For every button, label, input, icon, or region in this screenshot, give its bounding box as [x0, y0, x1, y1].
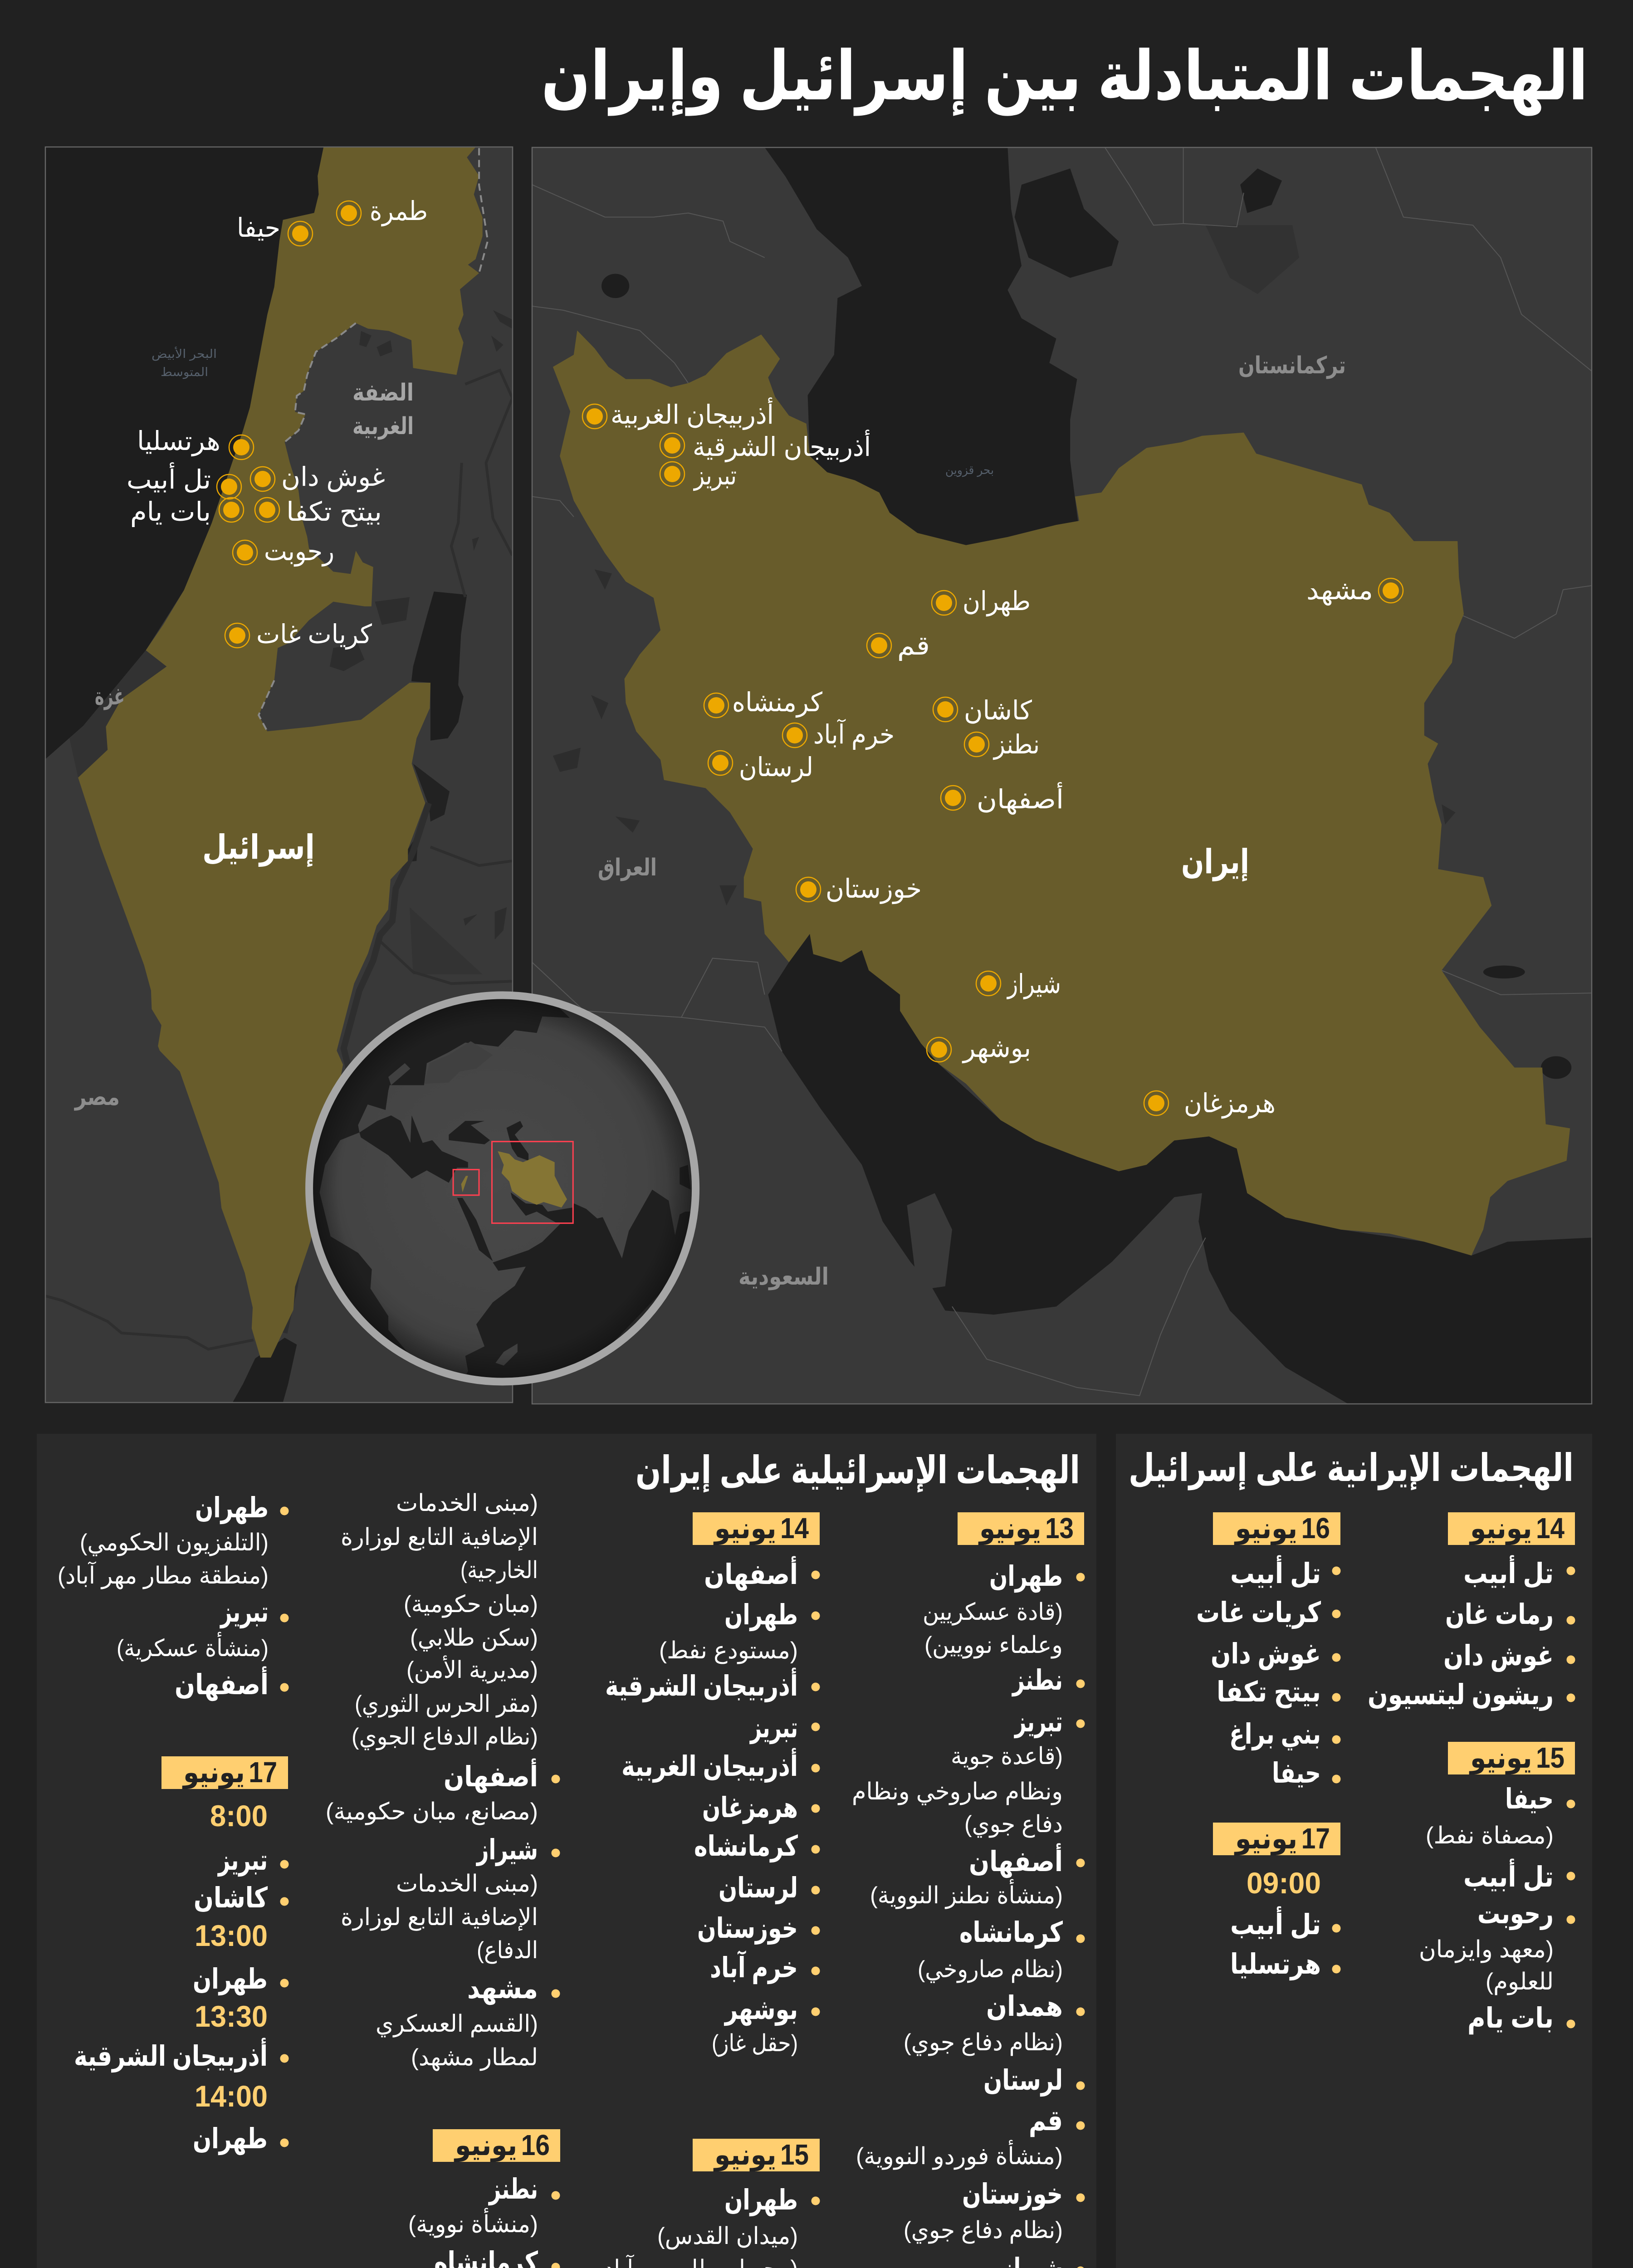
column: June 13: أصفهان	[969, 1843, 1063, 1878]
region label: Saudi Arabia: السعودية	[738, 1264, 829, 1290]
region label: West Bank	[352, 380, 414, 440]
column: June 15 continued and June 16: نطنز	[488, 2174, 538, 2205]
column: June 14 and 15: بات يام	[1467, 2003, 1554, 2035]
city labels: Iran: شيراز	[1007, 969, 1061, 1000]
column: June 13: (قادة عسكريين	[923, 1599, 1063, 1626]
city labels: Iran: تبريز	[693, 461, 737, 491]
column: June 13: طهران	[989, 1561, 1063, 1593]
globe locator	[306, 989, 702, 1388]
city labels: Iran: أصفهان	[977, 782, 1064, 815]
column: June 14 and 15: للعلوم)	[1486, 1969, 1554, 1995]
Iran territory	[553, 331, 1570, 1256]
column: June 14 and 15: خوزستان	[697, 1913, 798, 1945]
column: June 15 continued and June 16: (نظام الدفاع الجوي)	[352, 1724, 538, 1750]
city labels: Iran: هرمزغان	[1184, 1089, 1276, 1119]
globe oceans	[306, 989, 702, 1388]
column: June 16 and 17: كريات غات	[1196, 1597, 1321, 1629]
Scandinavia and Madagascar	[388, 1041, 518, 1366]
column: June 16 continued and June 17: أصفهان	[175, 1666, 269, 1701]
land borders	[45, 1296, 254, 1349]
column: June 15 continued and June 16: (مبان حكومية)	[404, 1591, 538, 1618]
Dead Sea	[411, 591, 467, 741]
column: June 15 continued and June 16: مشهد	[467, 1973, 538, 2005]
city labels: Iran: أذربيجان الشرقية	[693, 430, 871, 463]
column: June 16 and 17: غوش دان	[1211, 1638, 1321, 1670]
date: June 16: 16 يونيو	[454, 2129, 550, 2162]
column: June 16 continued and June 17: كاشان	[194, 1882, 268, 1914]
time 14:00: 14:00	[195, 2079, 268, 2113]
city labels: Iran: لرستان	[739, 753, 813, 783]
time 13:30: 13:30	[195, 1999, 268, 2033]
column: June 15 continued and June 16: شيراز	[476, 1834, 538, 1866]
country label: Israel: إسرائيل	[202, 828, 315, 867]
column: June 13: تبريز	[1014, 1706, 1063, 1738]
column: June 14 and 15	[590, 1512, 820, 2268]
city labels: Israel: كريات غات	[256, 620, 372, 650]
column: June 15 continued and June 16: (مقر الحرس الثوري)	[355, 1691, 538, 1718]
column: June 16 continued and June 17: تبريز	[217, 1845, 268, 1877]
column: June 16 continued and June 17: تبريز	[220, 1597, 269, 1628]
land shading: West Bank and Jordan	[330, 310, 512, 939]
country label: Iran: إيران	[1181, 843, 1249, 881]
column: June 13	[852, 1512, 1085, 2268]
column: June 14 and 15	[1368, 1512, 1575, 2035]
region label: Mediterranean: البحر الأبيض	[152, 346, 217, 361]
heading: Israeli attacks on Iran: الهجمات الإسرائيلية على إيران	[636, 1449, 1080, 1493]
city labels: Iran: كاشان	[964, 696, 1032, 725]
panel: Iranian attacks on Israel	[1116, 1434, 1592, 2268]
column: June 13: نطنز	[1012, 1665, 1063, 1696]
column: June 15 continued and June 16: لمطار مشهد)	[411, 2044, 538, 2071]
date: June 17: 17 يونيو	[1234, 1822, 1330, 1856]
Iran map labels	[582, 352, 1403, 1290]
column: June 14 and 15: (مستودع نفط)	[659, 1637, 798, 1664]
column: June 16 continued and June 17: (منشأة عسكرية)	[117, 1632, 269, 1662]
globe ring	[309, 995, 696, 1382]
date: June 14: 14 يونيو	[1469, 1512, 1565, 1545]
column: June 16 and 17: بني براغ	[1229, 1719, 1321, 1750]
panel: Iran map	[532, 147, 1592, 1408]
region label: Iraq: العراق	[598, 855, 657, 881]
column: June 16 continued and June 17: أذربيجان الشرقية	[74, 2038, 268, 2072]
country borders	[1105, 147, 1183, 225]
time 09:00: 09:00	[1247, 1866, 1321, 1900]
region label: Mediterranean	[152, 346, 217, 379]
land shading: Iraq and surroundings	[553, 569, 1456, 905]
column: June 14 and 15: تل أبيب	[1463, 1858, 1554, 1893]
markers: Israel cities	[217, 201, 361, 648]
region label: Gaza: غزة	[95, 684, 125, 710]
column: June 14 and 15: رحوبت	[1477, 1898, 1554, 1930]
column: June 14 and 15: كرمانشاه	[694, 1831, 798, 1862]
city labels: Iran: طهران	[963, 587, 1031, 617]
date: June 14: 14 يونيو	[713, 1512, 809, 1545]
column: June 14 and 15: أصفهان	[704, 1556, 798, 1591]
column: June 16 and 17	[1196, 1512, 1341, 1980]
column: June 16 and 17: بيتح تكفا	[1217, 1677, 1321, 1708]
column: June 15 continued and June 16: الإضافية التابع لوزارة	[341, 1904, 538, 1931]
city labels: Iran	[611, 397, 1373, 1119]
column: June 14 and 15: خرم آباد	[710, 1950, 798, 1984]
column: June 16 continued and June 17: طهران	[193, 2123, 268, 2155]
column: June 14 and 15: طهران	[724, 1599, 798, 1631]
column: June 16 continued and June 17: طهران	[193, 1964, 268, 1995]
region label: Egypt: مصر	[73, 1084, 120, 1111]
column: June 15 continued and June 16: (منشأة نووية)	[408, 2208, 538, 2238]
column: June 15 continued and June 16: أصفهان	[444, 1758, 538, 1793]
time 8:00: 8:00	[210, 1799, 268, 1833]
column: June 16 and 17: حيفا	[1272, 1758, 1321, 1789]
column: June 14 and 15: تل أبيب	[1463, 1555, 1554, 1589]
markers: Iran cities	[582, 404, 1403, 1115]
column: June 14 and 15: تبريز	[749, 1712, 798, 1744]
column: June 14 and 15: هرمزغان	[702, 1792, 798, 1824]
column: June 15 continued and June 16: الإضافية التابع لوزارة	[341, 1524, 538, 1551]
column: June 15 continued and June 16: الدفاع)	[477, 1937, 538, 1964]
city labels: Israel: تل أبيب	[127, 462, 211, 494]
date: June 17: 17 يونيو	[182, 1756, 277, 1789]
column: June 13: (نظام صاروخي)	[918, 1956, 1063, 1983]
date: June 15: 15 يونيو	[1469, 1741, 1565, 1775]
city labels: Israel	[127, 196, 428, 650]
Jordan valley	[413, 764, 450, 821]
column: June 13: همدان	[986, 1991, 1063, 2022]
city labels: Iran: مشهد	[1306, 576, 1373, 606]
date: June 16: 16 يونيو	[1234, 1512, 1330, 1545]
column: June 14 and 15: رمات غان	[1445, 1599, 1554, 1631]
column: June 14 and 15: ريشون ليتسيون	[1368, 1679, 1554, 1711]
region label: Mediterranean: المتوسط	[161, 365, 208, 379]
Iran on globe	[498, 1151, 567, 1207]
column: June 13: قم	[1029, 2105, 1063, 2137]
city labels: Israel: حيفا	[237, 213, 280, 243]
column: June 15 continued and June 16: (سكن طلابي)	[410, 1625, 538, 1652]
panel: Israeli attacks on Iran	[37, 1434, 1096, 2268]
city labels: Israel: رحوبت	[264, 537, 334, 567]
date: June 15: 15 يونيو	[713, 2138, 809, 2172]
panel: Israel map	[45, 147, 513, 1403]
city labels: Iran: قم	[897, 631, 930, 661]
region label: West Bank: الغربية	[352, 413, 414, 440]
region label: Caspian Sea: بحر قزوين	[945, 463, 994, 477]
Mediterranean sea	[45, 147, 323, 759]
region label: Turkmenistan: تركمانستان	[1238, 352, 1346, 379]
column: June 13: وعلماء نوويين)	[924, 1632, 1063, 1659]
column: June 16 and 17: هرتسليا	[1230, 1949, 1321, 1980]
city labels: Iran: أذربيجان الغربية	[611, 397, 774, 430]
column: June 15 continued and June 16: الخارجية)	[460, 1557, 538, 1584]
column: June 14 and 15: (معهد وايزمان	[1419, 1936, 1554, 1963]
city labels: Israel: هرتسليا	[137, 426, 220, 457]
column: June 13: لرستان	[983, 2065, 1063, 2097]
Gulf of Aqaba	[233, 1338, 297, 1403]
column: June 13: (منشأة نطنز النووية)	[870, 1879, 1063, 1909]
city labels: Iran: كرمنشاه	[732, 688, 822, 718]
lakes	[601, 274, 629, 298]
column: June 15 continued and June 16: (مبنى الخدمات	[396, 1490, 538, 1516]
column: June 13: (منشأة فوردو النووية)	[856, 2140, 1063, 2170]
column: June 13: دفاع جوي)	[964, 1811, 1063, 1838]
column: June 15 continued and June 16: (مديرية الأمن)	[406, 1655, 538, 1684]
column: June 14 and 15: لرستان	[719, 1872, 798, 1904]
Israel on globe	[461, 1176, 468, 1193]
column: June 16 continued and June 17: طهران	[195, 1492, 269, 1524]
column: June 16 and 17: تل أبيب	[1230, 1555, 1321, 1589]
city labels: Iran: بوشهر	[962, 1033, 1031, 1064]
column: June 15 continued and June 16: (مبنى الخدمات	[396, 1871, 538, 1897]
city labels: Iran: نطنز	[993, 730, 1040, 760]
column: June 15 continued and June 16: (مصانع، مبان حكومية)	[326, 1799, 538, 1825]
column: June 16 continued and June 17: (منطقة مطار مهر آباد)	[58, 1561, 269, 1589]
column: June 14 and 15: (مصفاة نفط)	[1426, 1823, 1554, 1849]
city labels: Iran: خرم آباد	[813, 719, 895, 750]
column: June 15 continued and June 16: (القسم العسكري	[376, 2011, 538, 2038]
column: June 14 and 15: أذربيجان الغربية	[621, 1748, 798, 1783]
city labels: Israel: بات يام	[130, 497, 211, 527]
column: June 15 continued and June 16	[326, 1490, 560, 2268]
red locator box: Israel	[453, 1169, 479, 1195]
column: June 14 and 15: أذربيجان الشرقية	[605, 1667, 798, 1702]
column: June 14 and 15: حيفا	[1505, 1784, 1554, 1815]
column: June 14 and 15: غوش دان	[1443, 1640, 1554, 1672]
city labels: Israel: غوش دان	[281, 462, 385, 493]
column: June 13: خوزستان	[962, 2179, 1063, 2210]
city labels: Israel: طمرة	[370, 196, 428, 227]
Caspian Sea	[765, 147, 1079, 545]
city labels: Israel: بيتح تكفا	[286, 497, 382, 527]
column: June 16 continued and June 17	[58, 1492, 288, 2155]
vignette	[308, 994, 696, 1382]
globe land	[308, 994, 696, 1382]
column: June 14 and 15: (حقل غاز)	[712, 2030, 798, 2057]
column: June 13: كرمانشاه	[959, 1917, 1063, 1949]
Kara-Bogaz	[1015, 168, 1119, 278]
column: June 14 and 15: (ميدان القدس)	[657, 2223, 798, 2250]
column: June 13: ونظام صاروخي ونظام	[852, 1779, 1063, 1805]
region label: West Bank: الضفة	[352, 380, 414, 406]
red locator box: Iran	[492, 1142, 573, 1223]
column: June 14 and 15: بوشهر	[724, 1994, 798, 2026]
date: June 13: 13 يونيو	[978, 1512, 1074, 1545]
city labels: Iran: خوزستان	[826, 874, 922, 904]
column: June 13: (نظام دفاع جوي)	[904, 2217, 1063, 2244]
column: June 16 and 17: تل أبيب	[1230, 1906, 1321, 1941]
Gaza strip	[69, 650, 166, 777]
Israel map labels	[73, 196, 428, 1111]
West Bank dashed border	[285, 323, 356, 442]
column: June 14 and 15: طهران	[724, 2185, 798, 2216]
Persian Gulf and Gulf of Oman	[768, 934, 1592, 1408]
column: June 13: (نظام دفاع جوي)	[904, 2029, 1063, 2056]
column: June 16 continued and June 17: (التلفزيون الحكومي)	[80, 1530, 269, 1556]
Israel territory	[78, 147, 483, 1358]
time 13:00: 13:00	[195, 1919, 268, 1952]
column: June 13: (قاعدة جوية	[951, 1743, 1063, 1770]
